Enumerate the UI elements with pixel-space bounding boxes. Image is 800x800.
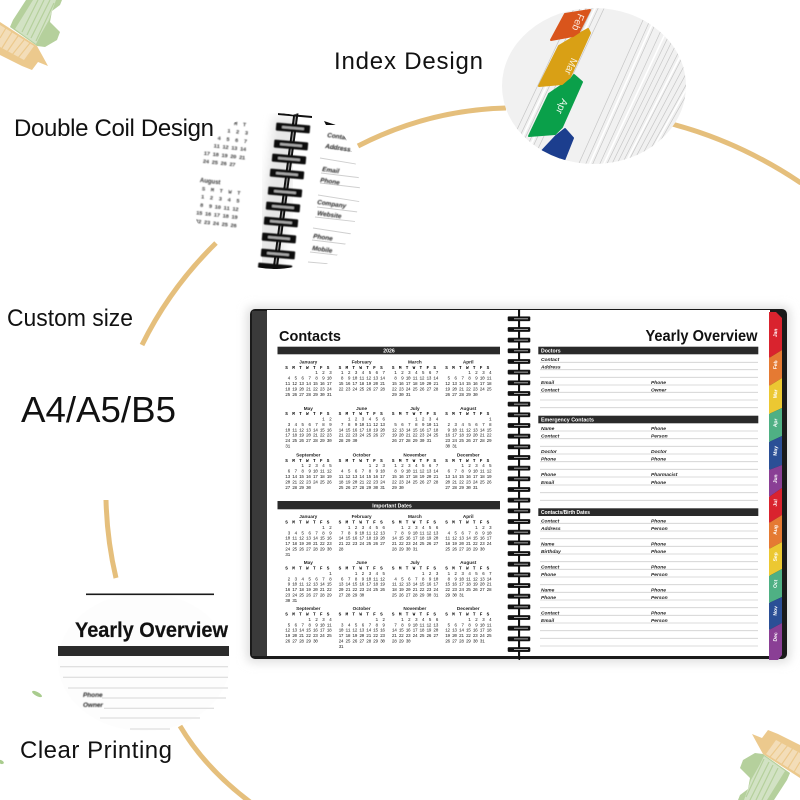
calendar: 2026: 15 16 17 18 19 20 21 [392,382,439,387]
calendar: 2027: 10 11 12 13 14 15 16 [285,537,332,542]
month index tabs: Mar [773,389,779,399]
calendar: 2027: 28 29 30 [392,640,411,645]
calendar: 2026: 28 29 30 [339,439,358,444]
month index tabs: Dec [773,632,779,642]
tab: Apr [529,75,582,136]
calendar: 2026: 1 2 3 4 [392,417,439,422]
calendar: 2027: July [410,560,420,565]
calendar: 2027: S M T W T F S [392,613,436,618]
field labels: Contact [541,610,560,616]
calendar: 2027: 1 2 3 4 5 [339,572,385,577]
calendar: 2026: S M T W T F S [392,366,436,371]
panel: left page [267,310,518,656]
calendar: 2026: 27 28 29 30 31 [445,486,478,491]
calendar: 2026: 11 12 13 14 15 16 17 [285,382,332,387]
month index tabs: May [773,446,779,456]
calendar fragment upper [202,122,248,167]
field labels: Phone [651,518,666,524]
calendar fragment lower: S M T W T [199,185,242,197]
calendar fragment upper: 1 2 3 [189,123,249,137]
calendar fragment upper: 17 18 19 20 21 [186,148,246,161]
calendar: 2027: September [296,606,321,611]
calendar: 2027: 5 6 7 8 9 10 11 [445,623,492,628]
field labels: Person [651,572,668,578]
calendar: 2026: 21 22 23 24 25 26 27 [339,434,385,439]
corner brush: top left [0,0,62,70]
section titles: Doctors [541,348,561,354]
size label: A4/A5/B5: A4/A5/B5 [21,389,176,430]
calendar: 2026: 24 25 26 27 28 29 30 [285,439,332,444]
calendar: 2026: 1 2 3 4 5 6 7 [392,371,439,376]
calendar: 2026: 13 14 15 16 17 18 19 [285,475,332,480]
calendar: 2027: 9 10 11 12 13 14 15 [285,583,332,588]
calendar: 2027: 3 4 5 6 7 8 9 [285,531,332,536]
calendar: 2026: 1 2 3 [285,371,332,376]
calendar: 2026: S M T W T F S [285,366,330,371]
calendar: 2026: 1 [445,417,492,422]
calendar: 2026: 11 12 13 14 15 16 17 [339,475,385,480]
calendar: 2027: May [304,560,313,565]
calendar fragment lower: August [199,178,221,186]
calendar: 2026: 18 19 20 21 22 23 24 [285,387,332,392]
section bar: year top [278,347,500,354]
calendar: 2027: S M T W T F S [445,613,490,618]
calendar: 2027: 11 12 13 14 15 16 17 [392,583,439,588]
calendar fragment lower: 15 16 17 18 19 [196,209,239,221]
calendar: 2027: 1 2 3 4 5 6 [392,618,439,623]
month index tabs: Aug [773,525,779,535]
calendar: 2027: 17 18 19 20 21 22 23 [285,542,332,547]
calendar: 2027: 12 13 14 15 16 17 18 [285,629,332,634]
tab: Feb: Feb [569,12,586,32]
calendar: 2027: 1 2 3 4 5 6 [339,526,385,531]
calendar fragment lower: 22 23 24 25 26 [195,218,238,229]
calendar: 2027: 26 27 28 29 30 31 [445,640,485,645]
calendar: 2026: October [353,452,371,458]
section bar: year top: 2026 [383,348,395,354]
month index tabs: Apr [773,418,779,427]
month index tabs [769,312,782,660]
calendar: 2027: 1 [285,572,332,577]
calendar: 2027: March [408,514,422,519]
calendar: 2027: 30 31 [285,599,298,604]
field labels: Phone [651,426,666,432]
calendar: 2026: 12 13 14 15 16 17 18 [445,382,492,387]
calendar: 2026: 20 21 22 23 24 25 26 [285,480,332,485]
calendar: 2027: 7 8 9 10 11 12 13 [339,531,385,536]
month index tabs: Nov [773,606,779,616]
field labels: Person [651,618,668,624]
calendar: 2027: 25 26 27 28 29 30 31 [392,594,439,599]
calendar: 2026: 22 23 24 25 26 27 28 [392,387,439,392]
calendar: 2026: S M T W T F S [445,412,490,417]
calendar fragment upper: M T [190,115,247,129]
calendar: 2026: 13 14 15 16 17 18 19 [445,475,492,480]
calendar: 2027: S M T W T F S [285,613,330,618]
tab: Mar: Mar [561,56,579,77]
calendar: 2027: 5 6 7 8 9 10 11 [285,623,332,628]
calendar: 2026: S M T W T F S [445,459,490,464]
field labels: Phone [320,177,340,187]
calendar: 2026: 25 26 27 28 29 30 31 [339,486,385,491]
magnified title: Yearly Overview [75,619,229,642]
field labels: Contact [327,132,352,142]
coil spine [275,113,296,270]
calendar: 2026: 5 6 7 8 9 10 11 [392,423,439,428]
calendar: 2026: 1 2 [285,417,332,422]
calendar: 2027: 4 5 6 7 8 9 10 [392,577,439,582]
calendar: 2027: 23 24 25 26 27 28 29 [285,594,332,599]
calendar: 2026: 2 3 4 5 6 7 8 [445,423,492,428]
calendar: 2026: 10 11 12 13 14 15 16 [285,428,332,433]
magnified field labels: Phone [83,692,103,699]
calendar: 2027: 19 20 21 22 23 24 25 [285,634,332,639]
field labels: Website [317,210,342,220]
calendar: 2027: 17 18 19 20 21 22 23 [339,634,385,639]
heading: Double Coil Design: Double Coil Design [14,115,214,142]
calendar: 2027: 1 2 3 4 [285,618,332,623]
calendar: 2027: June [356,560,367,565]
calendar: 2026: 29 30 [392,486,404,491]
calendar: 2026: S M T W T F S [285,412,330,417]
field labels: Contact [541,434,560,440]
calendar: 2027: 28 [339,548,344,553]
month index tabs: Oct [773,579,779,588]
calendar: 2026: 4 5 6 7 8 9 10 [339,470,385,475]
calendar: 2027: 20 21 22 23 24 25 26 [339,588,385,593]
calendar: 2027: S M T W T F S [285,521,330,526]
calendar: 2026: 19 20 21 22 23 24 25 [392,434,439,439]
calendar: 2027: August [460,560,477,565]
connecting gold arcs [106,108,800,800]
calendar: 2026: S M T W T F S [392,459,436,464]
calendar: 2027: 26 27 28 29 30 [285,640,318,645]
calendar: 2026: 7 8 9 10 11 12 13 [339,423,385,428]
field labels: Name [541,541,555,547]
calendar: 2026: 17 18 19 20 21 22 23 [285,434,332,439]
field labels: Phone [651,480,666,486]
calendar: 2027: 14 15 16 17 18 19 20 [392,537,439,542]
calendar: 2026: 8 9 10 11 12 13 14 [392,470,439,475]
detail circle: double coil [196,113,360,269]
ruled lines [308,148,360,264]
calendar: 2027: 8 9 10 11 12 13 14 [445,577,492,582]
calendar: 2027: February [352,514,372,519]
panel: right page [520,310,770,656]
double coil binding [507,309,531,660]
calendar: 2027: 1 2 [339,618,385,623]
open planner [247,307,790,662]
calendar: 2027: 11 12 13 14 15 16 17 [445,537,492,542]
field labels: Birthday [541,549,561,555]
coil rings [258,123,310,273]
calendar: 2026: 23 24 25 26 27 28 29 [445,439,492,444]
field labels: Email [322,166,340,175]
field labels: Owner [651,387,667,393]
calendar: 2026: 26 27 28 29 30 31 [392,439,432,444]
calendar: 2027: 2 3 4 5 6 7 8 [285,577,332,582]
section bars [538,347,758,516]
calendar: 2026: 12 13 14 15 16 17 18 [392,428,439,433]
calendar fragment lower: 8 9 10 11 12 [197,201,240,213]
calendar: 2026: March [408,360,422,364]
month index tabs: Feb [773,360,779,370]
field labels: Doctor [651,449,668,455]
field labels: Address [324,143,351,154]
calendar: 2027: 13 14 15 16 17 18 19 [339,583,385,588]
calendar: 2026: 8 9 10 11 12 13 14 [392,377,439,382]
calendar: 2026: 3 4 5 6 7 8 9 [285,423,332,428]
calendar: 2027: S M T W T F S [339,521,383,526]
calendar: 2026: S M T W T F S [339,366,383,371]
calendar: 2027: 29 30 31 [445,594,464,599]
calendar: 2026: May [304,406,313,411]
tab: Feb [551,10,590,40]
calendar: 2027 [285,514,492,650]
calendar: 2026: 1 2 3 4 5 [285,464,332,469]
calendar: 2026: 20 21 22 23 24 25 26 [445,480,492,485]
section bar: Important Dates [278,501,500,509]
calendar: 2027: 10 11 12 13 14 15 16 [339,629,385,634]
calendar: 2027: S M T W T F S [392,567,436,572]
calendar: 2026: December [457,452,480,458]
calendar: 2027: 21 22 23 24 25 26 27 [339,542,385,547]
section bar: Important Dates: Important Dates [372,503,412,509]
calendar: 2027: S M T W T F S [392,521,436,526]
calendar: 2026: 6 7 8 9 10 11 12 [445,470,492,475]
field labels: Contact [541,518,560,524]
field labels: Phone [541,595,556,601]
calendar: 2026: 16 17 18 19 20 21 22 [445,434,492,439]
calendar: 2027: 21 22 23 24 25 26 27 [392,542,439,547]
calendar: 2027: 1 2 [285,526,332,531]
calendar fragment lower [195,178,242,229]
calendar: 2026: 1 2 3 4 [445,371,492,376]
calendar: 2027: 1 2 3 4 [445,618,492,623]
field labels: Phone [541,472,556,478]
detail circle: index tabs [502,8,686,164]
calendar: 2027: 16 17 18 19 20 21 22 [285,588,332,593]
calendar: 2026: September [296,452,321,458]
calendar: 2026: 14 15 16 17 18 19 20 [339,428,385,433]
field labels: Phone [313,233,333,243]
left spine band [252,311,267,656]
calendar: 2026: S M T W T F S [392,412,436,417]
calendar: 2027: 31 [285,553,291,558]
calendar: 2027: 22 23 24 25 26 27 28 [445,588,492,593]
field labels: Phone [541,457,556,463]
field labels [540,357,678,624]
field labels: Doctor [541,449,558,455]
corner brush: bottom right [738,730,800,800]
month index tabs: Jul [773,498,779,507]
field labels: Phone [651,587,666,593]
calendar: 2026: August [460,406,477,411]
heading: Clear Printing: Clear Printing [20,737,172,764]
calendar: 2026: 5 6 7 8 9 10 11 [445,377,492,382]
calendar: 2026: 1 2 3 4 5 6 [339,417,385,422]
calendar: 2027: S M T W T F S [339,613,383,618]
calendar: 2026: 22 23 24 25 26 27 28 [392,480,439,485]
calendar: 2027: 28 29 30 31 [392,548,418,553]
calendar: 2027: S M T W T F S [445,567,490,572]
field labels: Name [541,587,555,593]
calendar: 2027: 4 5 6 7 8 9 10 [445,531,492,536]
page edges [517,8,686,164]
calendar: 2027: 1 2 3 [445,526,492,531]
field labels: Address [540,364,561,370]
field labels: Email [541,380,555,386]
calendar: 2027: October [353,606,371,611]
calendar: 2027: 31 [339,645,344,650]
magnified black bar [58,646,229,656]
calendar: 2027: January [299,514,318,519]
field labels: Phone [651,549,666,555]
calendar: 2026: 27 28 29 30 [285,486,311,491]
calendar fragment upper: 4 5 6 7 [188,131,247,145]
calendar: 2026: 31 [285,444,291,449]
calendar: 2026: S M T W T F S [285,459,330,464]
detail circle: clear printing [58,593,230,731]
calendar: 2026: July [410,406,420,411]
calendar: 2026: 8 9 10 11 12 13 14 [339,377,385,382]
calendar fragment upper: 24 25 26 27 [185,156,236,168]
field labels: Name [541,426,555,432]
field labels: Person [651,434,668,440]
calendar: 2026: November [403,452,427,458]
calendar: 2026: 22 23 24 25 26 27 28 [339,387,385,392]
calendar: 2027: 6 7 8 9 10 11 12 [339,577,385,582]
calendar: 2027: 19 20 21 22 23 24 25 [445,634,492,639]
calendar: 2026: 6 7 8 9 10 11 12 [285,470,332,475]
tab: blue [541,129,573,163]
calendar: 2026: 1 2 3 [339,464,385,469]
calendar: 2026: S M T W T F S [445,366,490,371]
calendar: 2027: 12 13 14 15 16 17 18 [445,629,492,634]
calendar: 2026: 30 31 [445,444,457,449]
calendar: 2027: November [403,606,427,611]
calendar: 2027: 1 2 3 4 5 6 [392,526,439,531]
calendar: 2026: June [356,406,367,411]
field labels: Phone [651,457,666,463]
calendar: 2026: 25 26 27 28 29 30 31 [285,393,332,398]
calendar: 2027: S M T W T F S [339,567,383,572]
calendar: 2027: 24 25 26 27 28 29 30 [339,640,385,645]
calendar: 2027: 18 19 20 21 22 23 24 [445,542,492,547]
heading: Custom size: Custom size [7,305,133,332]
calendar: 2027: 3 4 5 6 7 8 9 [339,623,385,628]
calendar: 2027: 25 26 27 28 29 30 [445,548,485,553]
field labels: Company [317,199,347,210]
calendar: 2027: 7 8 9 10 11 12 13 [392,531,439,536]
calendar: 2026: 1 2 3 4 5 6 7 [339,371,385,376]
calendar: 2026: 26 27 28 29 30 [445,393,478,398]
calendar: 2026: 4 5 6 7 8 9 10 [285,377,332,382]
calendar: 2027: S M T W T F S [445,521,490,526]
field labels: Person [651,595,668,601]
calendar: 2026: 1 2 3 4 5 6 7 [392,464,439,469]
calendar fragment lower: 1 2 3 4 5 [198,193,241,205]
calendar: 2027: 14 15 16 17 18 19 20 [392,629,439,634]
calendar: 2026: April [463,360,474,364]
calendar: 2027: 7 8 9 10 11 12 13 [392,623,439,628]
month index tabs: Jun [773,474,779,484]
field labels: Phone [651,541,666,547]
calendar: 2026: S M T W T F S [339,459,383,464]
calendar: 2026: 1 2 3 4 5 [445,464,492,469]
section titles [541,348,594,516]
calendar: 2026: 19 20 21 22 23 24 25 [445,387,492,392]
calendar: 2026 [285,360,492,491]
field labels [312,132,352,255]
field labels: Phone [651,380,666,386]
calendar: 2027: 1 2 3 [392,572,439,577]
month index tabs: Jan [773,328,779,337]
field labels: Phone [651,564,666,570]
field labels: Mobile [312,245,333,255]
calendar: 2026: 15 16 17 18 19 20 21 [392,475,439,480]
heading: Yearly Overview: Yearly Overview [646,328,758,345]
calendar: 2027: 14 15 16 17 18 19 20 [339,537,385,542]
field labels: Pharmacist [651,472,678,478]
field labels: Email [541,618,555,624]
calendar fragment upper: 11 12 13 14 [187,139,247,153]
calendar: 2026: 9 10 11 12 13 14 15 [445,428,492,433]
cover [250,309,787,659]
magnified field labels: Owner [83,702,103,709]
field labels: Contact [541,564,560,570]
calendar: 2027: 1 2 3 4 5 6 7 [445,572,492,577]
field labels: Person [651,526,668,532]
heading: Contacts: Contacts [279,328,341,345]
calendar: 2026: January [299,360,318,364]
section titles: Emergency Contacts [541,418,594,424]
field labels: Phone [541,572,556,578]
magnified field labels [83,692,103,709]
calendar: 2026: 29 30 31 [392,393,411,398]
tab: Mar [539,29,590,86]
month index tabs: Sep [773,552,779,562]
calendar: 2027: 24 25 26 27 28 29 30 [285,548,332,553]
calendar: 2026: 15 16 17 18 19 20 21 [339,382,385,387]
tab: Apr: Apr [553,97,570,116]
heading: Index Design: Index Design [334,48,483,75]
field labels: Address [540,526,561,532]
calendar: 2027: 15 16 17 18 19 20 21 [445,583,492,588]
calendar: 2027: 27 28 29 30 [339,594,365,599]
calendar: 2027: 18 19 20 21 22 23 24 [392,588,439,593]
field labels: Contact [541,387,560,393]
small green brush marks [0,690,43,765]
calendar: 2026: 18 19 20 21 22 23 24 [339,480,385,485]
field labels: Contact [541,357,560,363]
calendar: 2027: December [457,606,480,611]
calendar: 2026: S M T W T F S [339,412,383,417]
calendar: 2026: February [352,360,372,364]
calendar: 2027: S M T W T F S [285,567,330,572]
field labels: Phone [651,610,666,616]
calendar: 2027: April [463,514,474,519]
field labels: Email [541,480,555,486]
section titles: Contacts/Birth Dates [541,510,590,516]
calendar: 2027: 21 22 23 24 25 26 27 [392,634,439,639]
